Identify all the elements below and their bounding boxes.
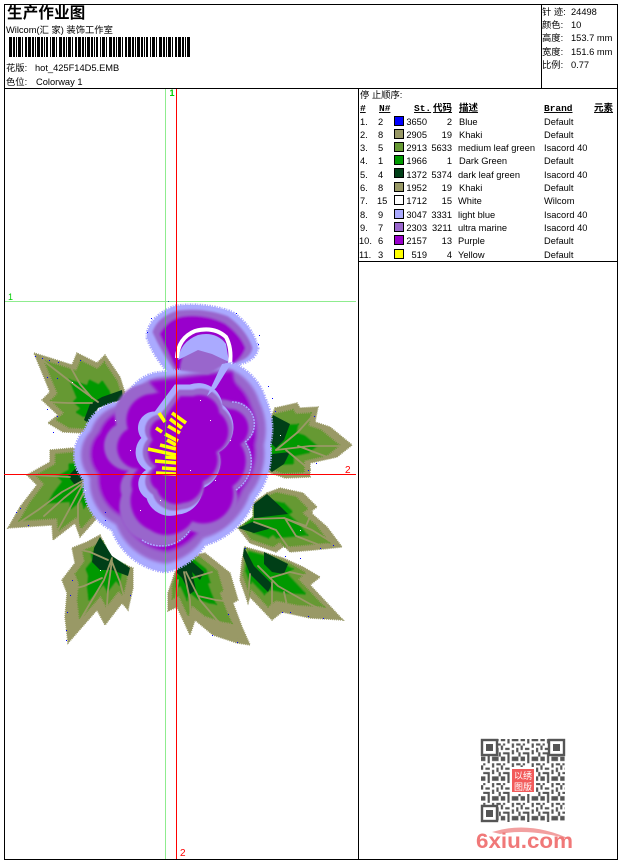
row 7 <box>360 196 575 206</box>
design stats <box>542 6 613 70</box>
design stats: 153.7 mm <box>571 33 613 43</box>
QR centre stamp <box>510 767 536 794</box>
design stats: 24498 <box>571 7 597 17</box>
leaf: upper left <box>34 353 125 433</box>
row 3: Isacord 40 <box>544 143 587 153</box>
row 7: Wilcom <box>544 196 575 206</box>
row 5: dark leaf green <box>458 170 520 180</box>
row 4: 1 <box>378 156 383 166</box>
row 10: 13 <box>442 236 452 246</box>
row 2: 2905 <box>406 130 427 140</box>
row 2: Khaki <box>459 130 482 140</box>
row 7: White <box>458 196 482 206</box>
row 10: Purple <box>458 236 485 246</box>
flower: yellow stamens <box>148 413 186 474</box>
row 3 <box>360 142 587 153</box>
design stats: 0.77 <box>571 60 589 70</box>
title: 生产作业图 <box>7 4 86 22</box>
row 9 <box>360 222 587 233</box>
leaf: lower right <box>240 547 343 620</box>
row 6: 1952 <box>406 183 427 193</box>
table caption: 停 止顺序: <box>360 89 402 100</box>
row 9: 2303 <box>406 223 427 233</box>
design stats: 151.6 mm <box>571 47 613 57</box>
row 7: 1712 <box>406 196 427 206</box>
row 9: Isacord 40 <box>544 223 587 233</box>
row 2: 2. <box>360 130 368 140</box>
design stats: 10 <box>571 20 581 30</box>
alignment crosshair: green lines <box>5 89 356 859</box>
leaf: bottom centre <box>168 553 250 645</box>
row 3: 2913 <box>406 143 427 153</box>
row 1: 2 <box>378 117 383 127</box>
row 2: Default <box>544 130 574 140</box>
row 5 <box>360 168 587 180</box>
row 10: 10. <box>359 236 372 246</box>
white stitch dots <box>72 382 301 571</box>
row 10: Default <box>544 236 574 246</box>
row 1: Blue <box>459 117 478 127</box>
row 5: 5374 <box>431 170 452 180</box>
row 8: 9 <box>378 210 383 220</box>
header: design information: Colorway 1 <box>36 77 83 87</box>
barcode <box>9 37 191 57</box>
flower: top petal <box>147 305 258 392</box>
crosshair labels: 1 <box>8 292 13 302</box>
row 4: 4. <box>360 156 368 166</box>
watermark: 6xiu.com: 6xiu.com <box>476 830 573 853</box>
company name: Wilcom(汇 家) 装饰工作室 <box>6 24 113 35</box>
row 11: 3 <box>378 250 383 260</box>
row 10: 6 <box>378 236 383 246</box>
flower: fold merge into body <box>150 372 236 400</box>
header: design information: hot_425F14D5.EMB <box>35 63 119 73</box>
row 11: Yellow <box>458 250 485 260</box>
row 1: 3650 <box>406 117 427 127</box>
design stats: 宽度: <box>542 46 563 57</box>
row 5: 5. <box>360 170 368 180</box>
row 1: 2 <box>447 117 452 127</box>
row 9: 3211 <box>432 223 452 233</box>
row 10 <box>359 236 574 246</box>
table header: Brand <box>544 103 573 114</box>
row 4: 1 <box>447 156 452 166</box>
row 4: 1966 <box>406 156 427 166</box>
row 4: Default <box>544 156 574 166</box>
row 5: Isacord 40 <box>544 170 587 180</box>
table header: # <box>360 103 366 114</box>
row 1: Default <box>544 117 574 127</box>
alignment crosshair: red lines <box>4 89 356 859</box>
row 11: Default <box>544 250 574 260</box>
design stats: 颜色: <box>542 19 563 30</box>
table header: N# <box>379 103 391 114</box>
row 11: 519 <box>411 250 427 260</box>
crosshair labels: 1 <box>170 88 175 98</box>
table header: 描述 <box>459 102 479 114</box>
row 9: 7 <box>378 223 383 233</box>
row 8: 3331 <box>431 210 452 220</box>
header: design information <box>6 4 191 87</box>
row 2: 19 <box>442 130 452 140</box>
row 2 <box>360 130 574 140</box>
flower: second petal ring <box>105 378 254 546</box>
leaf: right middle <box>238 488 342 552</box>
row 8: 8. <box>360 210 368 220</box>
row 6: Default <box>544 183 574 193</box>
row 7: 15 <box>377 196 387 206</box>
row 6: 6. <box>360 183 368 193</box>
row 8: 3047 <box>406 210 427 220</box>
design file name: 花版: <box>6 62 27 73</box>
row 11: 4 <box>447 250 452 260</box>
row 4: Dark Green <box>459 156 507 166</box>
design stats: 针 迹: <box>542 6 566 17</box>
row 11: 11. <box>359 250 371 260</box>
crosshair labels: 2 <box>345 465 351 476</box>
row 5: 4 <box>378 170 383 180</box>
stray stitch dots <box>16 301 334 643</box>
QR finder patterns <box>482 740 564 821</box>
row 1 <box>360 116 574 127</box>
row 11 <box>359 250 574 260</box>
table header: 代码 <box>433 102 453 114</box>
row 6: Khaki <box>459 183 482 193</box>
row 10: 2157 <box>406 236 427 246</box>
row 6: 19 <box>442 183 452 193</box>
QR code <box>481 739 565 822</box>
table header: St. <box>414 103 431 114</box>
row 8: Isacord 40 <box>544 210 587 220</box>
row 6 <box>360 182 574 193</box>
crosshair labels: 2 <box>180 848 186 859</box>
leaf: right upper <box>263 403 352 478</box>
row 7: 7. <box>360 196 368 206</box>
row 9: 9. <box>360 223 368 233</box>
QR centre stamp: 以绣 <box>514 770 532 781</box>
row 5: 1372 <box>406 170 427 180</box>
embroidery design: peony with leaves <box>8 301 352 645</box>
design stats: 高度: <box>542 32 563 43</box>
row 8 <box>360 210 587 220</box>
row 8: light blue <box>458 210 495 220</box>
crosshair labels <box>8 88 351 859</box>
stop sequence table <box>359 89 614 260</box>
table header: 元素 <box>594 102 614 114</box>
row 7: 15 <box>442 196 452 206</box>
row 9: ultra marine <box>458 223 507 233</box>
leaf: middle left <box>8 448 100 540</box>
row 3: medium leaf green <box>458 143 535 153</box>
flower: top petal fold <box>177 329 232 396</box>
row 2: 8 <box>378 130 383 140</box>
flower: central petal ring <box>136 384 233 515</box>
flower: ultra marine and purple body shading <box>82 369 265 563</box>
row 3: 5633 <box>431 143 452 153</box>
design stats: 比例: <box>542 59 563 70</box>
table header <box>360 102 614 114</box>
row 3: 3. <box>360 143 368 153</box>
row 3: 5 <box>378 143 383 153</box>
leaf: lower left <box>62 535 133 643</box>
QR centre stamp: 图版 <box>514 781 532 792</box>
row 1: 1. <box>360 117 368 127</box>
colorway: 色位: <box>6 76 27 87</box>
flower: outer light blue body <box>74 363 272 572</box>
row 4 <box>360 156 574 166</box>
row 6: 8 <box>378 183 383 193</box>
